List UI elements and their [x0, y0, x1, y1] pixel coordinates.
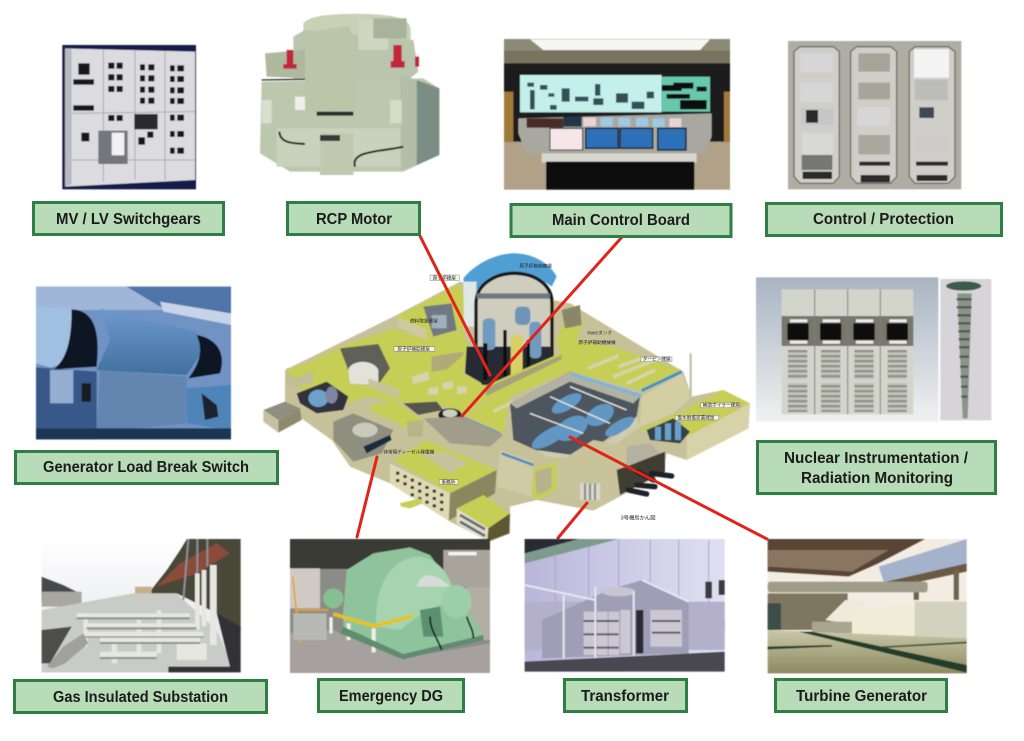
front roof block — [370, 400, 423, 432]
left annex — [263, 402, 300, 420]
left cutaway equipment — [297, 382, 348, 413]
plant building labels: 原子炉補助機械棟 — [578, 339, 616, 346]
panel: nuclear instrumentation / radiation monitoring — [756, 277, 996, 494]
label: MV / LV Switchgears: MV / LV Switchgears — [56, 211, 201, 228]
label: Emergency DG — [318, 680, 464, 712]
central plant cutaway illustration — [263, 253, 750, 542]
photo: RCP motor — [260, 14, 439, 175]
photo: control room — [504, 39, 730, 190]
main left roof — [287, 328, 493, 413]
plant building labels — [383, 262, 740, 521]
containment interior — [476, 273, 552, 383]
plant building labels: 事務所 — [441, 478, 456, 485]
photo: emergency diesel generator — [290, 539, 490, 673]
label: Control / Protection — [766, 204, 1002, 236]
label: Main Control Board — [511, 204, 731, 236]
panel: generator load break switch — [16, 287, 278, 484]
back roof block — [397, 283, 467, 338]
reactor auxiliary cutaway — [340, 344, 390, 387]
photo: control cabinets — [788, 41, 961, 189]
photo: switchgear — [62, 45, 196, 189]
photo: instrumentation cabinets — [756, 277, 938, 422]
label: Transformer — [564, 680, 686, 712]
yard and transformers — [557, 440, 667, 510]
plant building labels: RWSタンク — [587, 330, 612, 337]
photo: substation — [42, 539, 241, 672]
panel: emergency DG — [290, 539, 490, 712]
plant building labels: 原子炉補助建屋 — [397, 345, 430, 352]
roof boxes — [412, 372, 429, 384]
leader: RCP motor — [420, 236, 490, 375]
leader: emergency DG — [357, 457, 377, 537]
label: Nuclear Instrumentation / Radiation Monitoring: Radiation Monitoring — [801, 470, 953, 487]
label: Nuclear Instrumentation / Radiation Monitoring: Nuclear Instrumentation / — [784, 450, 969, 467]
panel: main control board — [504, 39, 731, 236]
panel: RCP motor — [260, 14, 439, 235]
photo: generator load break switch — [36, 287, 231, 439]
panel: gas insulated substation — [14, 539, 266, 712]
label: Gas Insulated Substation — [14, 680, 266, 712]
label: Main Control Board: Main Control Board — [552, 212, 690, 229]
plant building labels: 補助ボイラー建屋 — [703, 402, 740, 409]
label: Nuclear Instrumentation / Radiation Monitoring — [758, 442, 996, 494]
label: Transformer: Transformer — [581, 688, 669, 705]
label: Turbine Generator — [776, 680, 946, 712]
leader: turbine generator — [570, 437, 767, 539]
label: Gas Insulated Substation: Gas Insulated Substation — [53, 689, 228, 706]
photo: turbine hall — [768, 539, 967, 673]
label: Control / Protection: Control / Protection — [813, 211, 954, 228]
label: Turbine Generator: Turbine Generator — [796, 688, 927, 705]
leader: main control board — [462, 237, 622, 416]
plant building labels: タービン建屋 — [643, 356, 671, 363]
plant building labels: 復水脱塩装置建屋 — [677, 414, 715, 421]
label: Generator Load Break Switch — [16, 452, 278, 484]
right auxiliary buildings — [638, 390, 750, 437]
plant base walls — [285, 282, 750, 542]
diesel generator cutaway — [333, 413, 393, 462]
panel: transformer — [525, 539, 725, 712]
panel: control / protection — [766, 41, 1002, 236]
label: RCP Motor — [288, 202, 420, 234]
leader: transformer — [558, 503, 587, 538]
blue roof edges — [461, 372, 682, 434]
photo: radiation detector — [940, 279, 991, 420]
panel: turbine generator — [768, 539, 967, 712]
dome — [463, 253, 557, 300]
label: RCP Motor: RCP Motor — [316, 211, 392, 228]
plant building labels: 原子炉格納容器 — [519, 262, 552, 269]
turbine hall cutaway — [510, 372, 640, 457]
photo: transformer — [525, 539, 725, 672]
label: Emergency DG: Emergency DG — [339, 688, 443, 705]
office building — [393, 440, 497, 493]
plant building labels: 3号機鳥かん図 — [621, 513, 656, 521]
red leader lines — [357, 236, 767, 539]
plant building labels: 原子炉建屋 — [433, 274, 456, 281]
panel: MV / LV switchgears — [34, 45, 224, 235]
raised roof block — [413, 345, 463, 372]
plant building labels: 非常用ディーゼル発電機 — [383, 448, 435, 455]
label: MV / LV Switchgears — [34, 202, 224, 234]
right turbine roof — [463, 303, 682, 433]
annex office — [457, 495, 510, 528]
control room rings — [438, 408, 462, 422]
plant building labels: 燃料取扱建屋 — [410, 318, 438, 325]
label: Generator Load Break Switch: Generator Load Break Switch — [43, 459, 249, 476]
